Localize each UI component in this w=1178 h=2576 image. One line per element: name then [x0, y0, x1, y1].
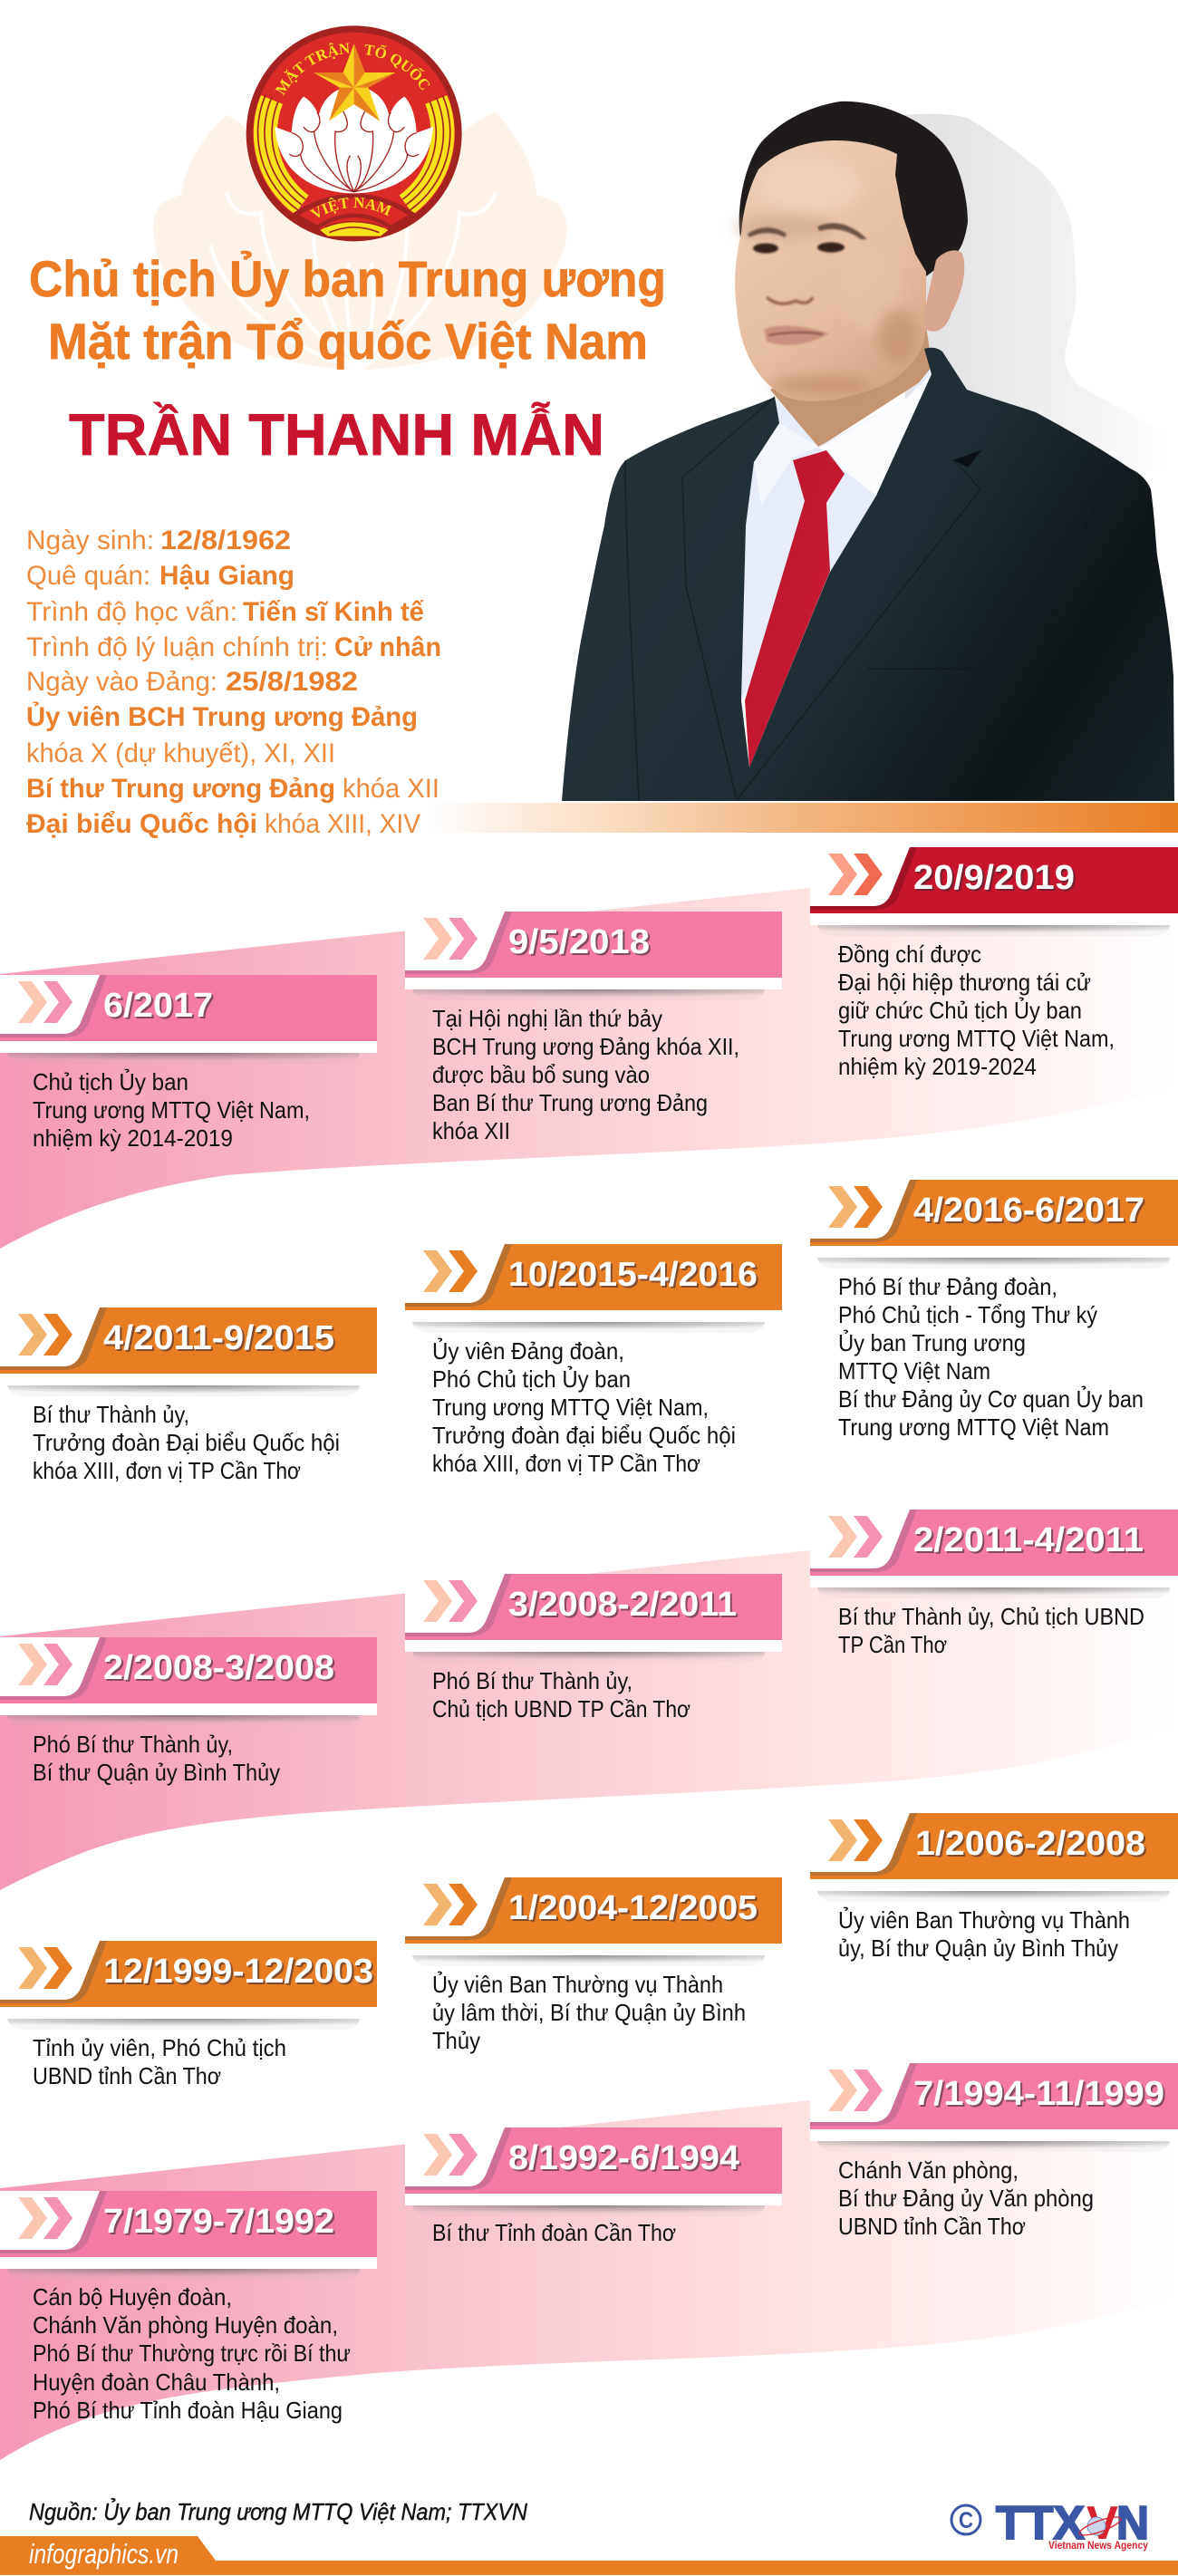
personal details: Trình độ lý luận chính trị:	[26, 632, 328, 662]
card text	[838, 941, 1115, 1080]
card text: Bí thư Thành ủy,	[33, 1401, 189, 1428]
title: Chủ tịch Ủy ban Trung ương	[29, 250, 666, 307]
card text: Trung ương MTTQ Việt Nam	[838, 1413, 1109, 1441]
name heading: TRẦN THANH MẪN	[69, 401, 604, 468]
personal details: Ngày vào Đảng:	[26, 667, 217, 697]
card text: khóa XII	[432, 1117, 510, 1144]
card text	[838, 1905, 1130, 1962]
portrait tie	[745, 450, 845, 767]
card: 3/2008-2/2011	[405, 1574, 782, 1722]
card: 4/2011-9/2015: 4/2011-9/2015	[103, 1319, 334, 1357]
card text: Phó Bí thư Tỉnh đoàn Hậu Giang	[33, 2397, 343, 2424]
card text: Bí thư Đảng ủy Văn phòng	[838, 2185, 1094, 2212]
logo lettering: VIỆT NAM	[310, 198, 392, 217]
personal details: Ngày sinh:	[26, 526, 154, 555]
card text	[33, 1067, 310, 1152]
card: 8/1992-6/1994: 8/1992-6/1994	[508, 2139, 739, 2177]
swoosh band 1	[0, 888, 1178, 1249]
card text: Ban Bí thư Trung ương Đảng	[432, 1089, 708, 1116]
card text	[432, 1005, 739, 1144]
card text: Huyện đoàn Châu Thành,	[33, 2369, 280, 2396]
card text: được bầu bổ sung vào	[432, 1061, 650, 1088]
card text: Trưởng đoàn đại biểu Quốc hội	[432, 1422, 736, 1449]
personal details: Đại biểu Quốc hội	[26, 809, 257, 839]
card: 4/2011-9/2015	[0, 1307, 377, 1484]
portrait suit	[562, 348, 1174, 801]
portrait facial features	[748, 223, 867, 345]
card text: Chánh Văn phòng Huyện đoàn,	[33, 2311, 338, 2339]
card text: Phó Bí thư Thành ủy,	[33, 1731, 233, 1758]
card: 10/2015-4/2016	[405, 1244, 782, 1477]
card text: giữ chức Chủ tịch Ủy ban	[838, 996, 1082, 1024]
card: 3/2008-2/2011: 3/2008-2/2011	[508, 1586, 737, 1624]
card: 6/2017	[0, 975, 377, 1152]
personal details: Hậu Giang	[159, 561, 294, 591]
card text	[33, 1401, 340, 1484]
card text: Cán bộ Huyện đoàn,	[33, 2283, 232, 2311]
card text	[33, 2034, 286, 2089]
card text: BCH Trung ương Đảng khóa XII,	[432, 1033, 739, 1060]
card text	[33, 2283, 351, 2424]
card text: Phó Chủ tịch Ủy ban	[432, 1365, 631, 1393]
personal details: khóa X (dự khuyết), XI, XII	[26, 738, 335, 768]
card text: Bí thư Tỉnh đoàn Cần Thơ	[432, 2219, 676, 2246]
logo lettering	[275, 43, 430, 217]
card text: MTTQ Việt Nam	[838, 1357, 990, 1384]
source line: Nguồn: Ủy ban Trung ương MTTQ Việt Nam; TTXVN	[29, 2497, 527, 2525]
portrait neck	[770, 326, 933, 448]
TTXVN logo	[951, 2497, 1149, 2552]
card text: ủy lâm thời, Bí thư Quận ủy Bình	[432, 1999, 746, 2026]
card: 4/2016-6/2017	[810, 1180, 1178, 1441]
card text: Chánh Văn phòng,	[838, 2156, 1019, 2184]
card text: UBND tỉnh Cần Thơ	[838, 2213, 1026, 2240]
TTXVN logo: TTX	[996, 2497, 1085, 2550]
personal details: Cử nhân	[334, 632, 441, 662]
card text: Chủ tịch UBND TP Cần Thơ	[432, 1695, 690, 1722]
card: 6/2017: 6/2017	[103, 987, 213, 1025]
orange header bar	[426, 803, 1178, 833]
personal details: khóa XIII, XIV	[265, 809, 420, 839]
card text: ủy, Bí thư Quận ủy Bình Thủy	[838, 1934, 1118, 1962]
card text: Ủy viên Đảng đoàn,	[432, 1336, 624, 1365]
personal details: 12/8/1962	[160, 526, 291, 555]
card text: Đại hội hiệp thương tái cử	[838, 969, 1091, 996]
portrait ear	[923, 250, 964, 332]
card: 7/1994-11/1999	[810, 2063, 1178, 2240]
card text: khóa XIII, đơn vị TP Cần Thơ	[33, 1457, 301, 1484]
personal details	[26, 526, 441, 839]
card: 8/1992-6/1994	[405, 2127, 782, 2246]
card: 2/2008-3/2008: 2/2008-3/2008	[103, 1649, 334, 1687]
card text: UBND tỉnh Cần Thơ	[33, 2062, 221, 2089]
card text	[33, 1731, 280, 1786]
card text: Thủy	[432, 2027, 480, 2054]
card text: Phó Bí thư Thành ủy,	[432, 1667, 632, 1694]
card text: nhiệm kỳ 2019-2024	[838, 1053, 1037, 1080]
footer bar: infographics.vn	[29, 2538, 179, 2570]
card: 9/5/2018	[405, 912, 782, 1144]
card text: Trung ương MTTQ Việt Nam,	[838, 1025, 1115, 1052]
title	[29, 250, 666, 370]
card text: Phó Chủ tịch - Tổng Thư ký	[838, 1301, 1097, 1328]
card text: Phó Bí thư Thường trực rồi Bí thư	[33, 2340, 351, 2367]
card: 10/2015-4/2016: 10/2015-4/2016	[508, 1256, 758, 1294]
card text	[838, 2156, 1094, 2240]
card text	[838, 1603, 1144, 1658]
personal details: khóa XII	[343, 774, 439, 804]
card text: Ủy viên Ban Thường vụ Thành	[838, 1905, 1130, 1934]
portrait: Trần Thanh Mẫn	[562, 101, 1178, 801]
portrait face	[735, 140, 926, 401]
card text: nhiệm kỳ 2014-2019	[33, 1124, 233, 1152]
card: 7/1979-7/1992	[0, 2191, 377, 2424]
card text: Phó Bí thư Đảng đoàn,	[838, 1273, 1057, 1300]
footer bar	[0, 2536, 1178, 2575]
card text: Tỉnh ủy viên, Phó Chủ tịch	[33, 2034, 286, 2061]
card text	[432, 1667, 690, 1722]
logo lettering: TỔ QUỐC	[364, 43, 430, 91]
personal details: Trình độ học vấn:	[26, 597, 237, 627]
card: 20/9/2019	[810, 847, 1178, 1080]
card: 2/2011-4/2011	[810, 1510, 1178, 1658]
title: Mặt trận Tổ quốc Việt Nam	[48, 313, 648, 370]
card: 4/2016-6/2017: 4/2016-6/2017	[913, 1192, 1144, 1230]
card text	[432, 1336, 736, 1477]
card text	[432, 1970, 746, 2054]
card: 7/1979-7/1992: 7/1979-7/1992	[103, 2203, 334, 2241]
card: 1/2004-12/2005	[405, 1877, 782, 2054]
card: 20/9/2019: 20/9/2019	[913, 859, 1075, 897]
portrait hair	[739, 101, 968, 276]
logo lettering: MẶT TRẬN	[275, 43, 350, 96]
card: 1/2006-2/2008: 1/2006-2/2008	[915, 1825, 1145, 1863]
card text: Trung ương MTTQ Việt Nam,	[432, 1394, 709, 1421]
TTXVN logo: Vietnam News Agency	[1048, 2539, 1148, 2552]
card text: Trung ương MTTQ Việt Nam,	[33, 1096, 310, 1124]
card text: TP Cần Thơ	[838, 1631, 947, 1658]
card: 1/2004-12/2005: 1/2004-12/2005	[508, 1889, 758, 1927]
faint lotus watermark	[153, 111, 567, 370]
card text: Ủy viên Ban Thường vụ Thành	[432, 1970, 723, 1998]
personal details: Quê quán:	[26, 561, 150, 591]
card: 1/2006-2/2008	[810, 1813, 1178, 1962]
card: 12/1999-12/2003	[0, 1941, 377, 2089]
card: 9/5/2018: 9/5/2018	[508, 923, 650, 961]
portrait shirt	[741, 367, 933, 700]
card text: Trưởng đoàn Đại biểu Quốc hội	[33, 1429, 340, 1456]
personal details: Tiến sĩ Kinh tế	[243, 597, 424, 627]
logo: Mặt trận Tổ quốc Việt Nam	[246, 25, 462, 241]
card text: Bí thư Quận ủy Bình Thủy	[33, 1759, 280, 1786]
card text	[838, 1273, 1144, 1441]
TTXVN logo: V	[1086, 2497, 1118, 2550]
card: 12/1999-12/2003: 12/1999-12/2003	[103, 1953, 373, 1991]
personal details: Bí thư Trung ương Đảng	[26, 774, 335, 804]
card: 7/1994-11/1999: 7/1994-11/1999	[913, 2075, 1164, 2113]
TTXVN logo: N	[1116, 2497, 1149, 2550]
card text: Bí thư Đảng ủy Cơ quan Ủy ban	[838, 1384, 1144, 1413]
swoosh band 3	[0, 2100, 1178, 2460]
card text: Bí thư Thành ủy, Chủ tịch UBND	[838, 1603, 1144, 1630]
personal details: Ủy viên BCH Trung ương Đảng	[26, 701, 418, 732]
personal details: 25/8/1982	[226, 667, 358, 697]
card text: khóa XIII, đơn vị TP Cần Thơ	[432, 1450, 700, 1477]
card: 2/2011-4/2011: 2/2011-4/2011	[913, 1521, 1144, 1559]
card text: Chủ tịch Ủy ban	[33, 1067, 188, 1095]
card text: Đồng chí được	[838, 941, 981, 968]
TTXVN logo: C	[959, 2508, 973, 2533]
card: 2/2008-3/2008	[0, 1637, 377, 1786]
card text: Tại Hội nghị lần thứ bảy	[432, 1005, 662, 1032]
swoosh band 2	[0, 1550, 1178, 1890]
card text: Ủy ban Trung ương	[838, 1328, 1026, 1356]
